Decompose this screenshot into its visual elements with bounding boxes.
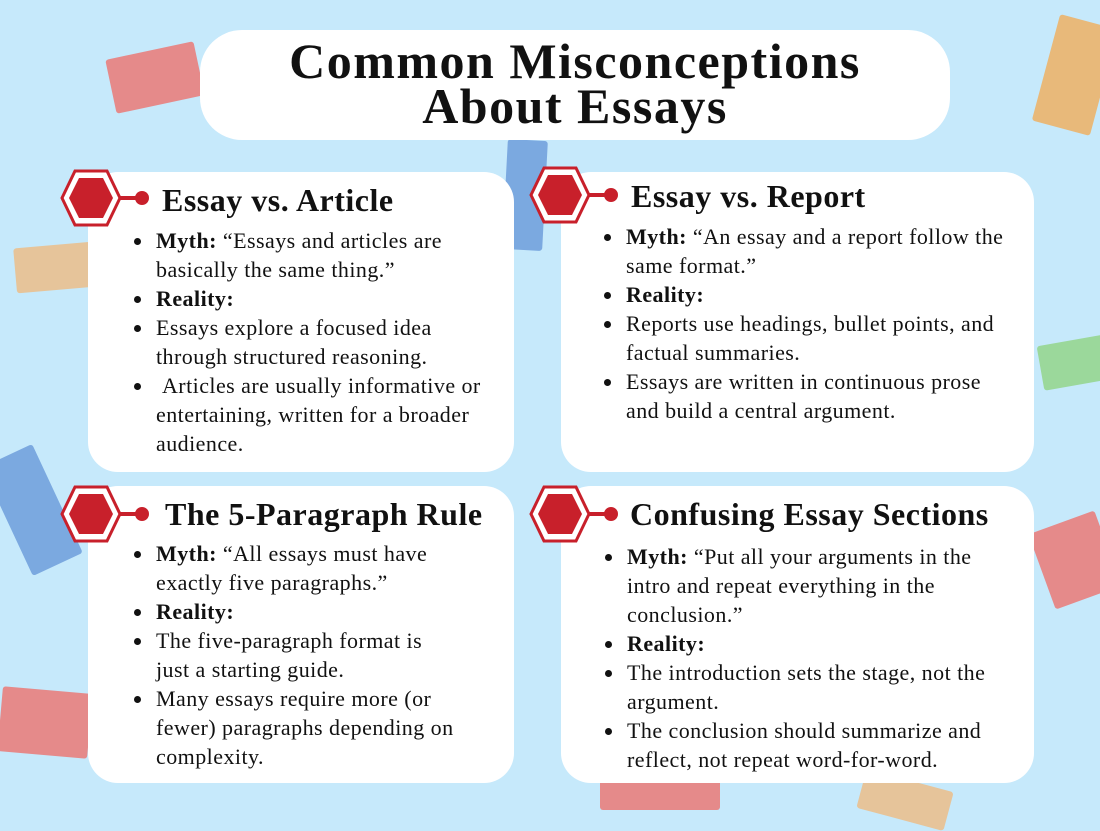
list — [605, 544, 985, 772]
list: argument. — [627, 689, 719, 714]
list: reflect, not repeat word-for-word. — [627, 747, 938, 772]
list: Essays are written in continuous prose — [626, 369, 981, 394]
list: Myth: “Essays and articles are — [156, 228, 442, 253]
list: The five-paragraph format is — [156, 628, 422, 653]
list: The introduction sets the stage, not the — [627, 660, 985, 685]
heading: Essay vs. Article — [162, 182, 394, 218]
list: Reality: — [156, 286, 234, 311]
list: intro and repeat everything in the — [627, 573, 935, 598]
icon: hexagon TR — [529, 166, 618, 224]
list: and build a central argument. — [626, 398, 896, 423]
list: audience. — [156, 431, 244, 456]
panel: essay vs article — [88, 172, 514, 472]
panel: essay vs report — [561, 172, 1034, 472]
list: through structured reasoning. — [156, 344, 428, 369]
list: Reality: — [627, 631, 705, 656]
list — [134, 541, 454, 769]
list: entertaining, written for a broader — [156, 402, 469, 427]
icon: hexagon TL — [60, 170, 149, 226]
list — [604, 224, 1003, 423]
list: Myth: “An essay and a report follow the — [626, 224, 1003, 249]
list: Reports use headings, bullet points, and — [626, 311, 994, 336]
heading: Confusing Essay Sections — [630, 496, 989, 532]
list: Many essays require more (or — [156, 686, 431, 711]
list: complexity. — [156, 744, 264, 769]
heading: The 5-Paragraph Rule — [165, 496, 483, 532]
list: Myth: “All essays must have — [156, 541, 427, 566]
list: Articles are usually informative or — [162, 373, 481, 398]
panel: 5-paragraph rule — [88, 486, 514, 783]
list: just a starting guide. — [156, 657, 344, 682]
heading: Essay vs. Report — [631, 178, 866, 214]
list: Reality: — [626, 282, 704, 307]
title — [200, 30, 950, 140]
list: Essays explore a focused idea — [156, 315, 432, 340]
list: exactly five paragraphs.” — [156, 570, 388, 595]
list: fewer) paragraphs depending on — [156, 715, 454, 740]
list: The conclusion should summarize and — [627, 718, 981, 743]
icon: hexagon BL — [60, 486, 149, 542]
list: same format.” — [626, 253, 756, 278]
list: factual summaries. — [626, 340, 800, 365]
list — [134, 228, 481, 456]
title: About Essays — [422, 78, 728, 134]
list: Myth: “Put all your arguments in the — [627, 544, 972, 569]
title: Common Misconceptions — [289, 33, 861, 89]
list: conclusion.” — [627, 602, 743, 627]
panel: confusing essay sections — [561, 486, 1034, 783]
list: Reality: — [156, 599, 234, 624]
list: basically the same thing.” — [156, 257, 395, 282]
icon: hexagon BR — [529, 486, 618, 542]
